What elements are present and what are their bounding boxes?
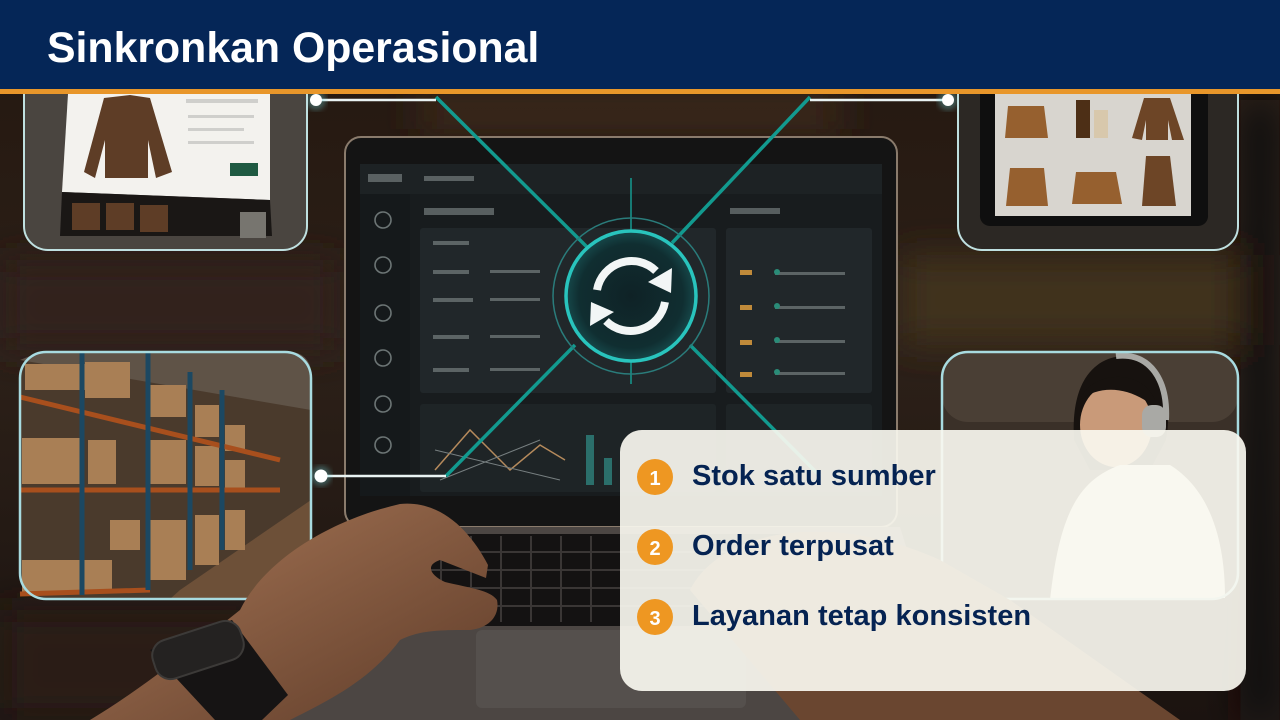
point 2 [637,529,894,565]
inset: product grid tablet [958,94,1238,250]
laptop [290,137,960,720]
panel: key points [620,430,1246,691]
title: Sinkronkan Operasional [47,24,539,72]
inset: customer service agent [942,352,1238,600]
inset: product detail tablet [24,94,307,250]
point 1: 1 [649,468,661,490]
sync hub icon [553,178,709,384]
point 2: Order terpusat [692,530,894,562]
inset: warehouse [20,352,311,599]
point 1: Stok satu sumber [692,460,936,492]
point 2: 2 [649,538,661,560]
teal connector lines [436,97,820,476]
point 3: Layanan tetap konsisten [692,600,1031,632]
header band [0,0,1280,89]
point 3: 3 [649,608,661,630]
hands and watch [90,504,1180,720]
